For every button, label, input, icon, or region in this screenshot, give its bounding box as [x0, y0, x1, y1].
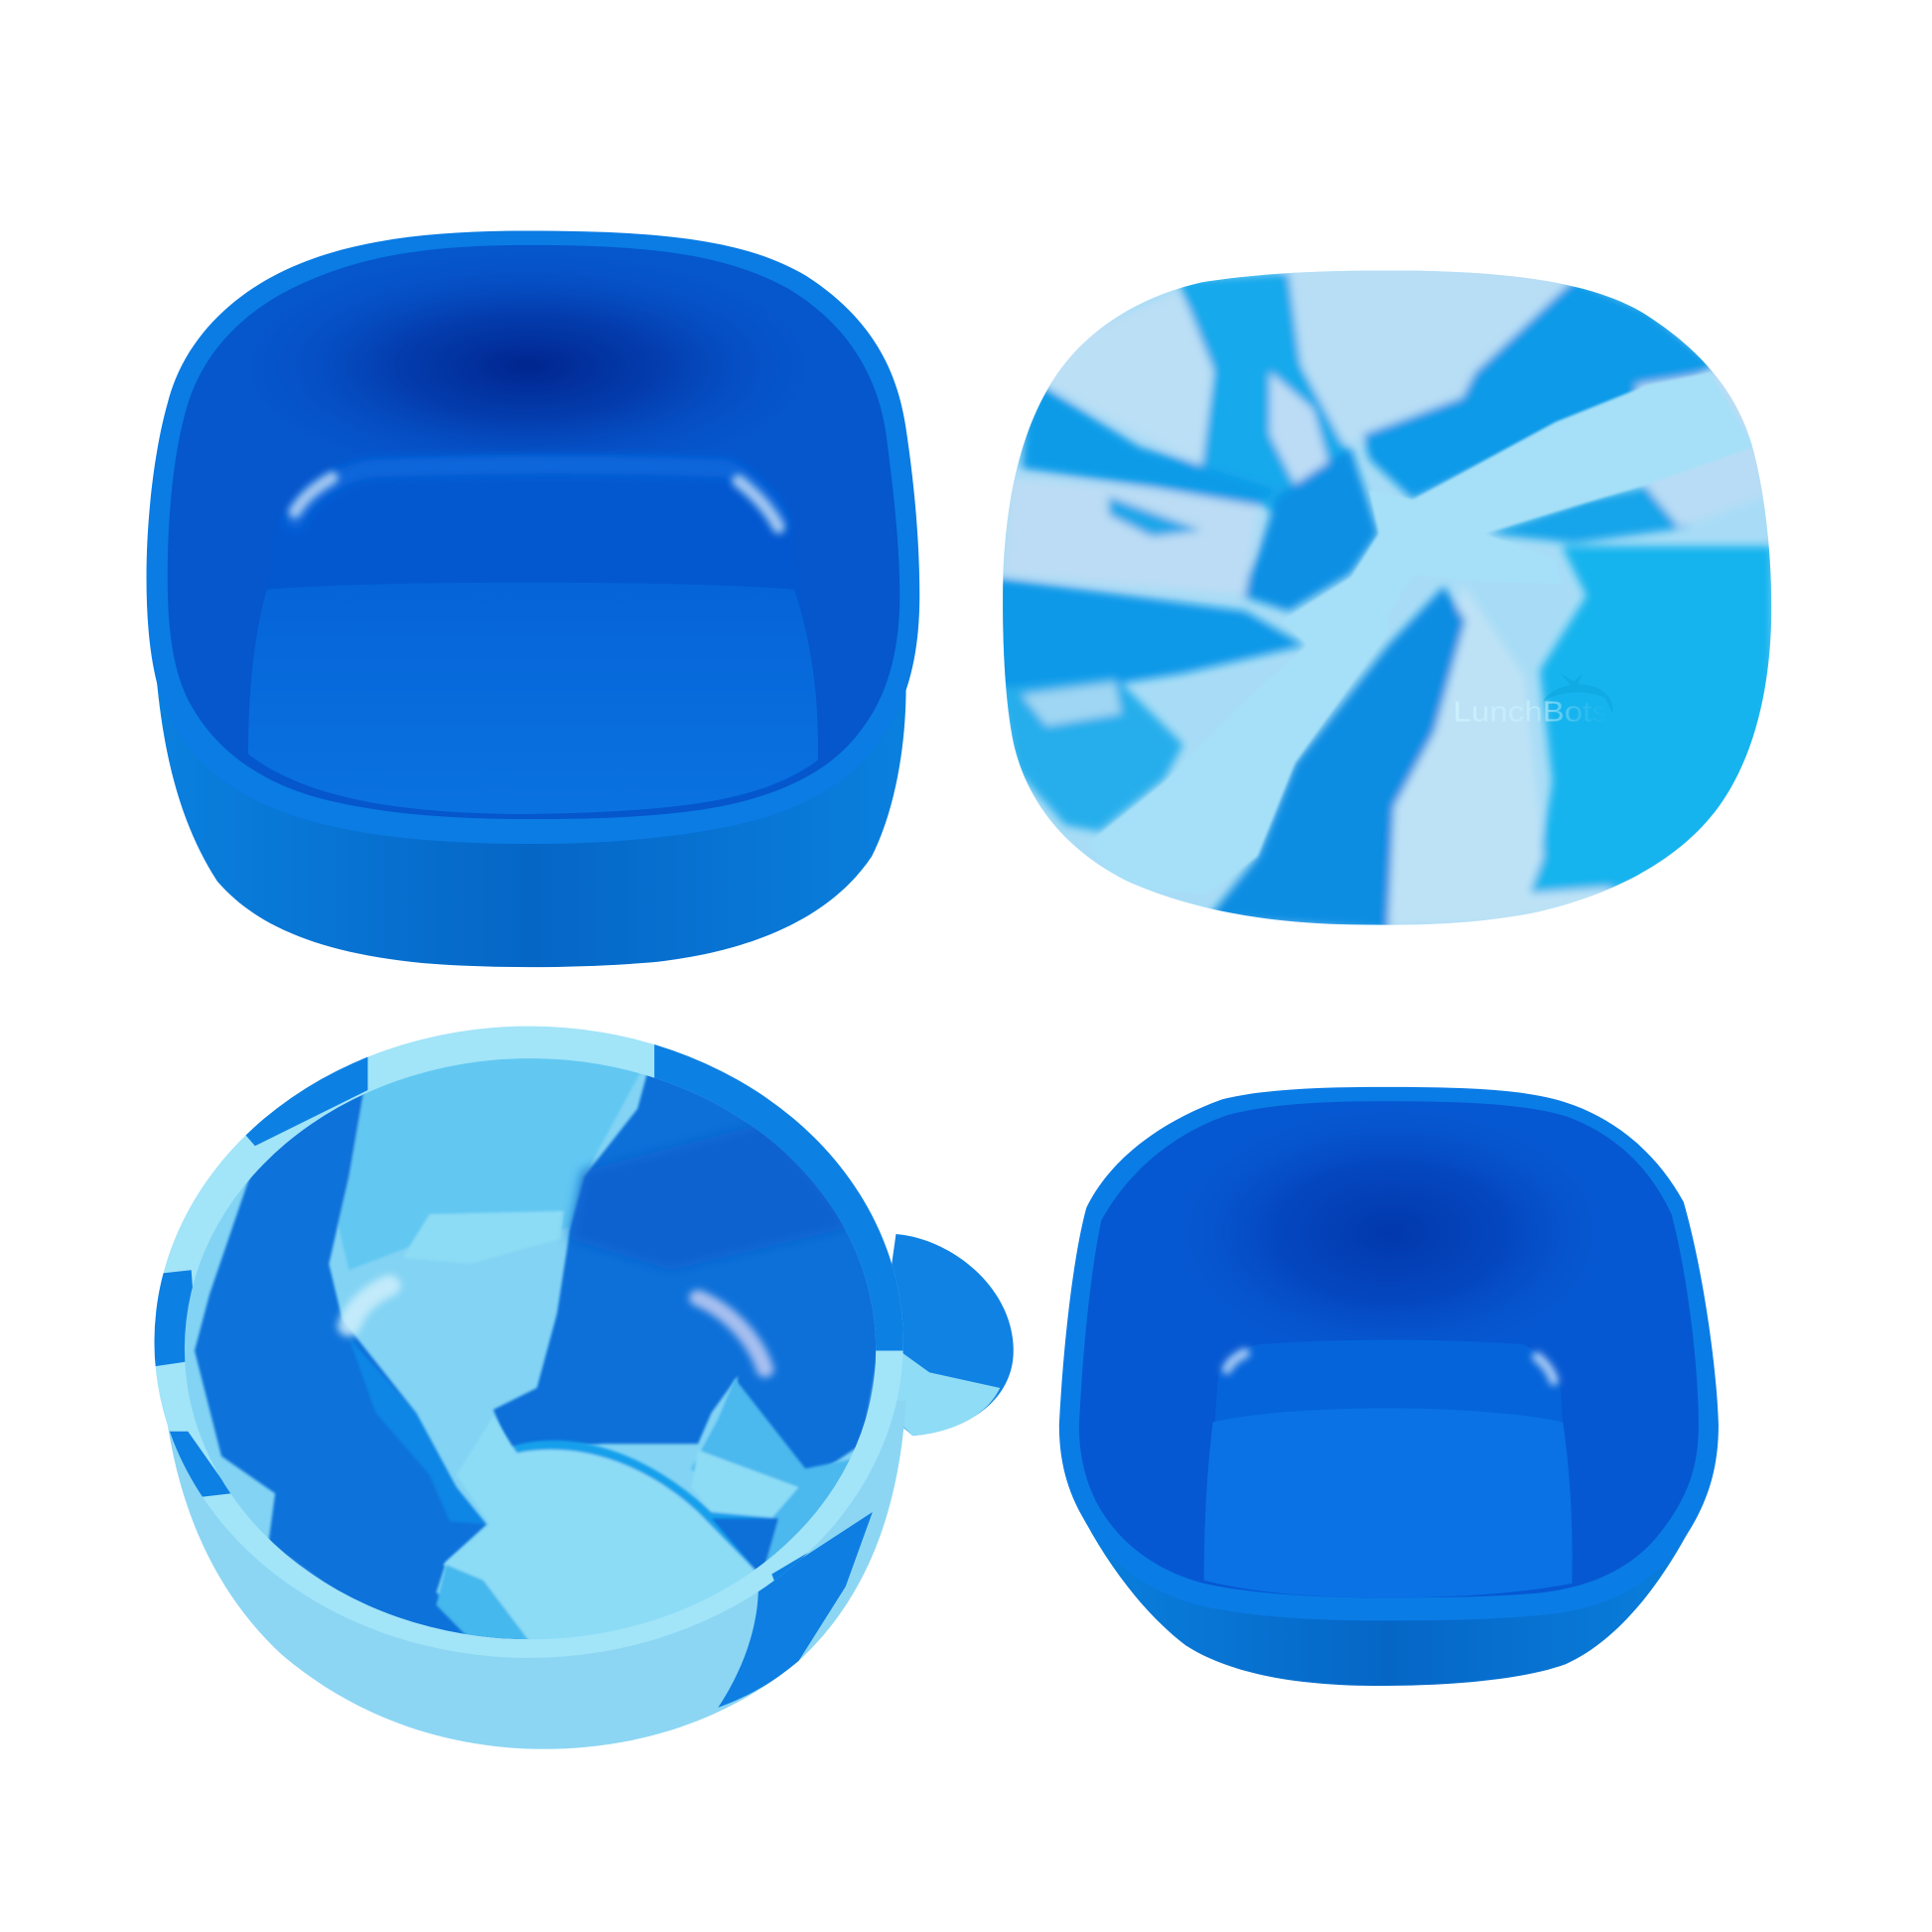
interior swirl patches [195, 1035, 893, 1642]
bowl rim [147, 230, 919, 844]
patch: lower centre light [443, 1416, 761, 1642]
bowl: solid blue small square, bottom right [1059, 1087, 1719, 1686]
patch: cyan foot [436, 1565, 530, 1642]
bowl base [1003, 270, 1771, 925]
patch: right rim pale [778, 1449, 893, 1575]
rim blue segments [154, 1044, 903, 1581]
bowl floor [248, 455, 819, 814]
patch: darker upper band [571, 1121, 853, 1270]
bowl rim [1059, 1087, 1719, 1620]
bowl floor panel [248, 583, 818, 814]
patch: lower-left accent [349, 1338, 486, 1525]
bowl floor panel [1204, 1408, 1573, 1597]
bowl: swirl round bowl with tab, bottom left [134, 1003, 1014, 1749]
highlight: left corner [1227, 1353, 1245, 1369]
patch: lower right pale [691, 1449, 798, 1518]
bowl: solid blue large square, top left [147, 230, 919, 967]
bowl exterior wall [157, 676, 906, 967]
bowl interior wall [1079, 1101, 1699, 1597]
tab light section [890, 1350, 1000, 1436]
central light band [1087, 372, 1754, 894]
logo: embossed tomato mark [1543, 674, 1613, 714]
floor lip [292, 466, 782, 527]
patch: pale streak [403, 1211, 564, 1264]
exterior blue section [718, 1512, 873, 1708]
bowl: tie-dye swirl square, top right [991, 267, 1773, 931]
pull tab [873, 1234, 1014, 1436]
highlight: right corner [1537, 1357, 1554, 1380]
bowl floor [1204, 1340, 1572, 1597]
patch: lower right cyan [691, 1378, 850, 1561]
logo text: LunchBots [1453, 696, 1608, 728]
bowl interior shadow [236, 248, 819, 484]
highlight: right [698, 1298, 765, 1369]
bowl interior [185, 1058, 876, 1639]
bowl interior shadow [1162, 1096, 1620, 1369]
bowl rim [154, 1027, 903, 1658]
highlight: left corner [295, 478, 332, 512]
patch: right deep blue [492, 1075, 876, 1470]
swirl patches [991, 267, 1773, 931]
highlight: left [349, 1286, 389, 1326]
tab body [873, 1234, 1014, 1436]
highlight: right corner [739, 481, 778, 527]
patch: crescent border and corner blue [512, 1440, 775, 1571]
bowl exterior [165, 1400, 906, 1749]
patch: upper cyan [337, 1058, 640, 1271]
bowl exterior wall [1077, 1506, 1702, 1686]
bowl interior wall [168, 245, 899, 819]
patch: left blue stream and lower-left blue [195, 1052, 530, 1642]
